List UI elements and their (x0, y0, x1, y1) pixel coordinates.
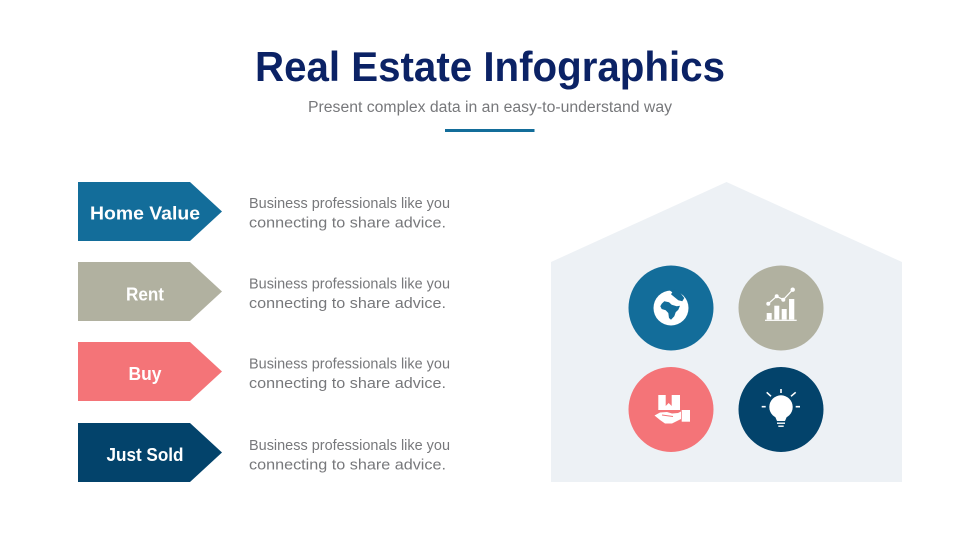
icon: hand holding building (628, 367, 714, 452)
description: Rent: connecting to share advice. (249, 295, 446, 312)
icon: growth chart (738, 266, 824, 350)
subtitle: Present complex data in an easy-to-understand way (308, 99, 672, 116)
label: Buy: Buy (128, 364, 162, 384)
row: Rent (78, 262, 450, 321)
description: Buy: connecting to share advice. (249, 375, 446, 392)
description: Buy: Business professionals like you (249, 356, 450, 372)
label: Home Value: Home Value (90, 204, 200, 224)
arrow: Home Value (78, 182, 222, 241)
description: Home Value: connecting to share advice. (249, 214, 446, 232)
description: Home Value: Business professionals like you (249, 195, 450, 212)
arrow: Buy (78, 342, 222, 401)
row: Buy (78, 342, 450, 401)
description: Just Sold: Business professionals like you (249, 437, 450, 454)
arrow: Rent (78, 262, 222, 321)
row: Just Sold (78, 423, 450, 482)
house panel (551, 182, 902, 482)
row: Home Value (78, 182, 450, 241)
title: Real Estate Infographics (255, 43, 725, 90)
title underline (445, 129, 534, 132)
arrow: Just Sold (78, 423, 222, 482)
description: Rent: Business professionals like you (249, 276, 450, 292)
label: Just Sold: Just Sold (106, 445, 184, 465)
icon: light bulb (738, 367, 824, 452)
icon: globe (628, 266, 714, 350)
description: Just Sold: connecting to share advice. (249, 456, 446, 474)
label: Rent: Rent (126, 284, 164, 304)
